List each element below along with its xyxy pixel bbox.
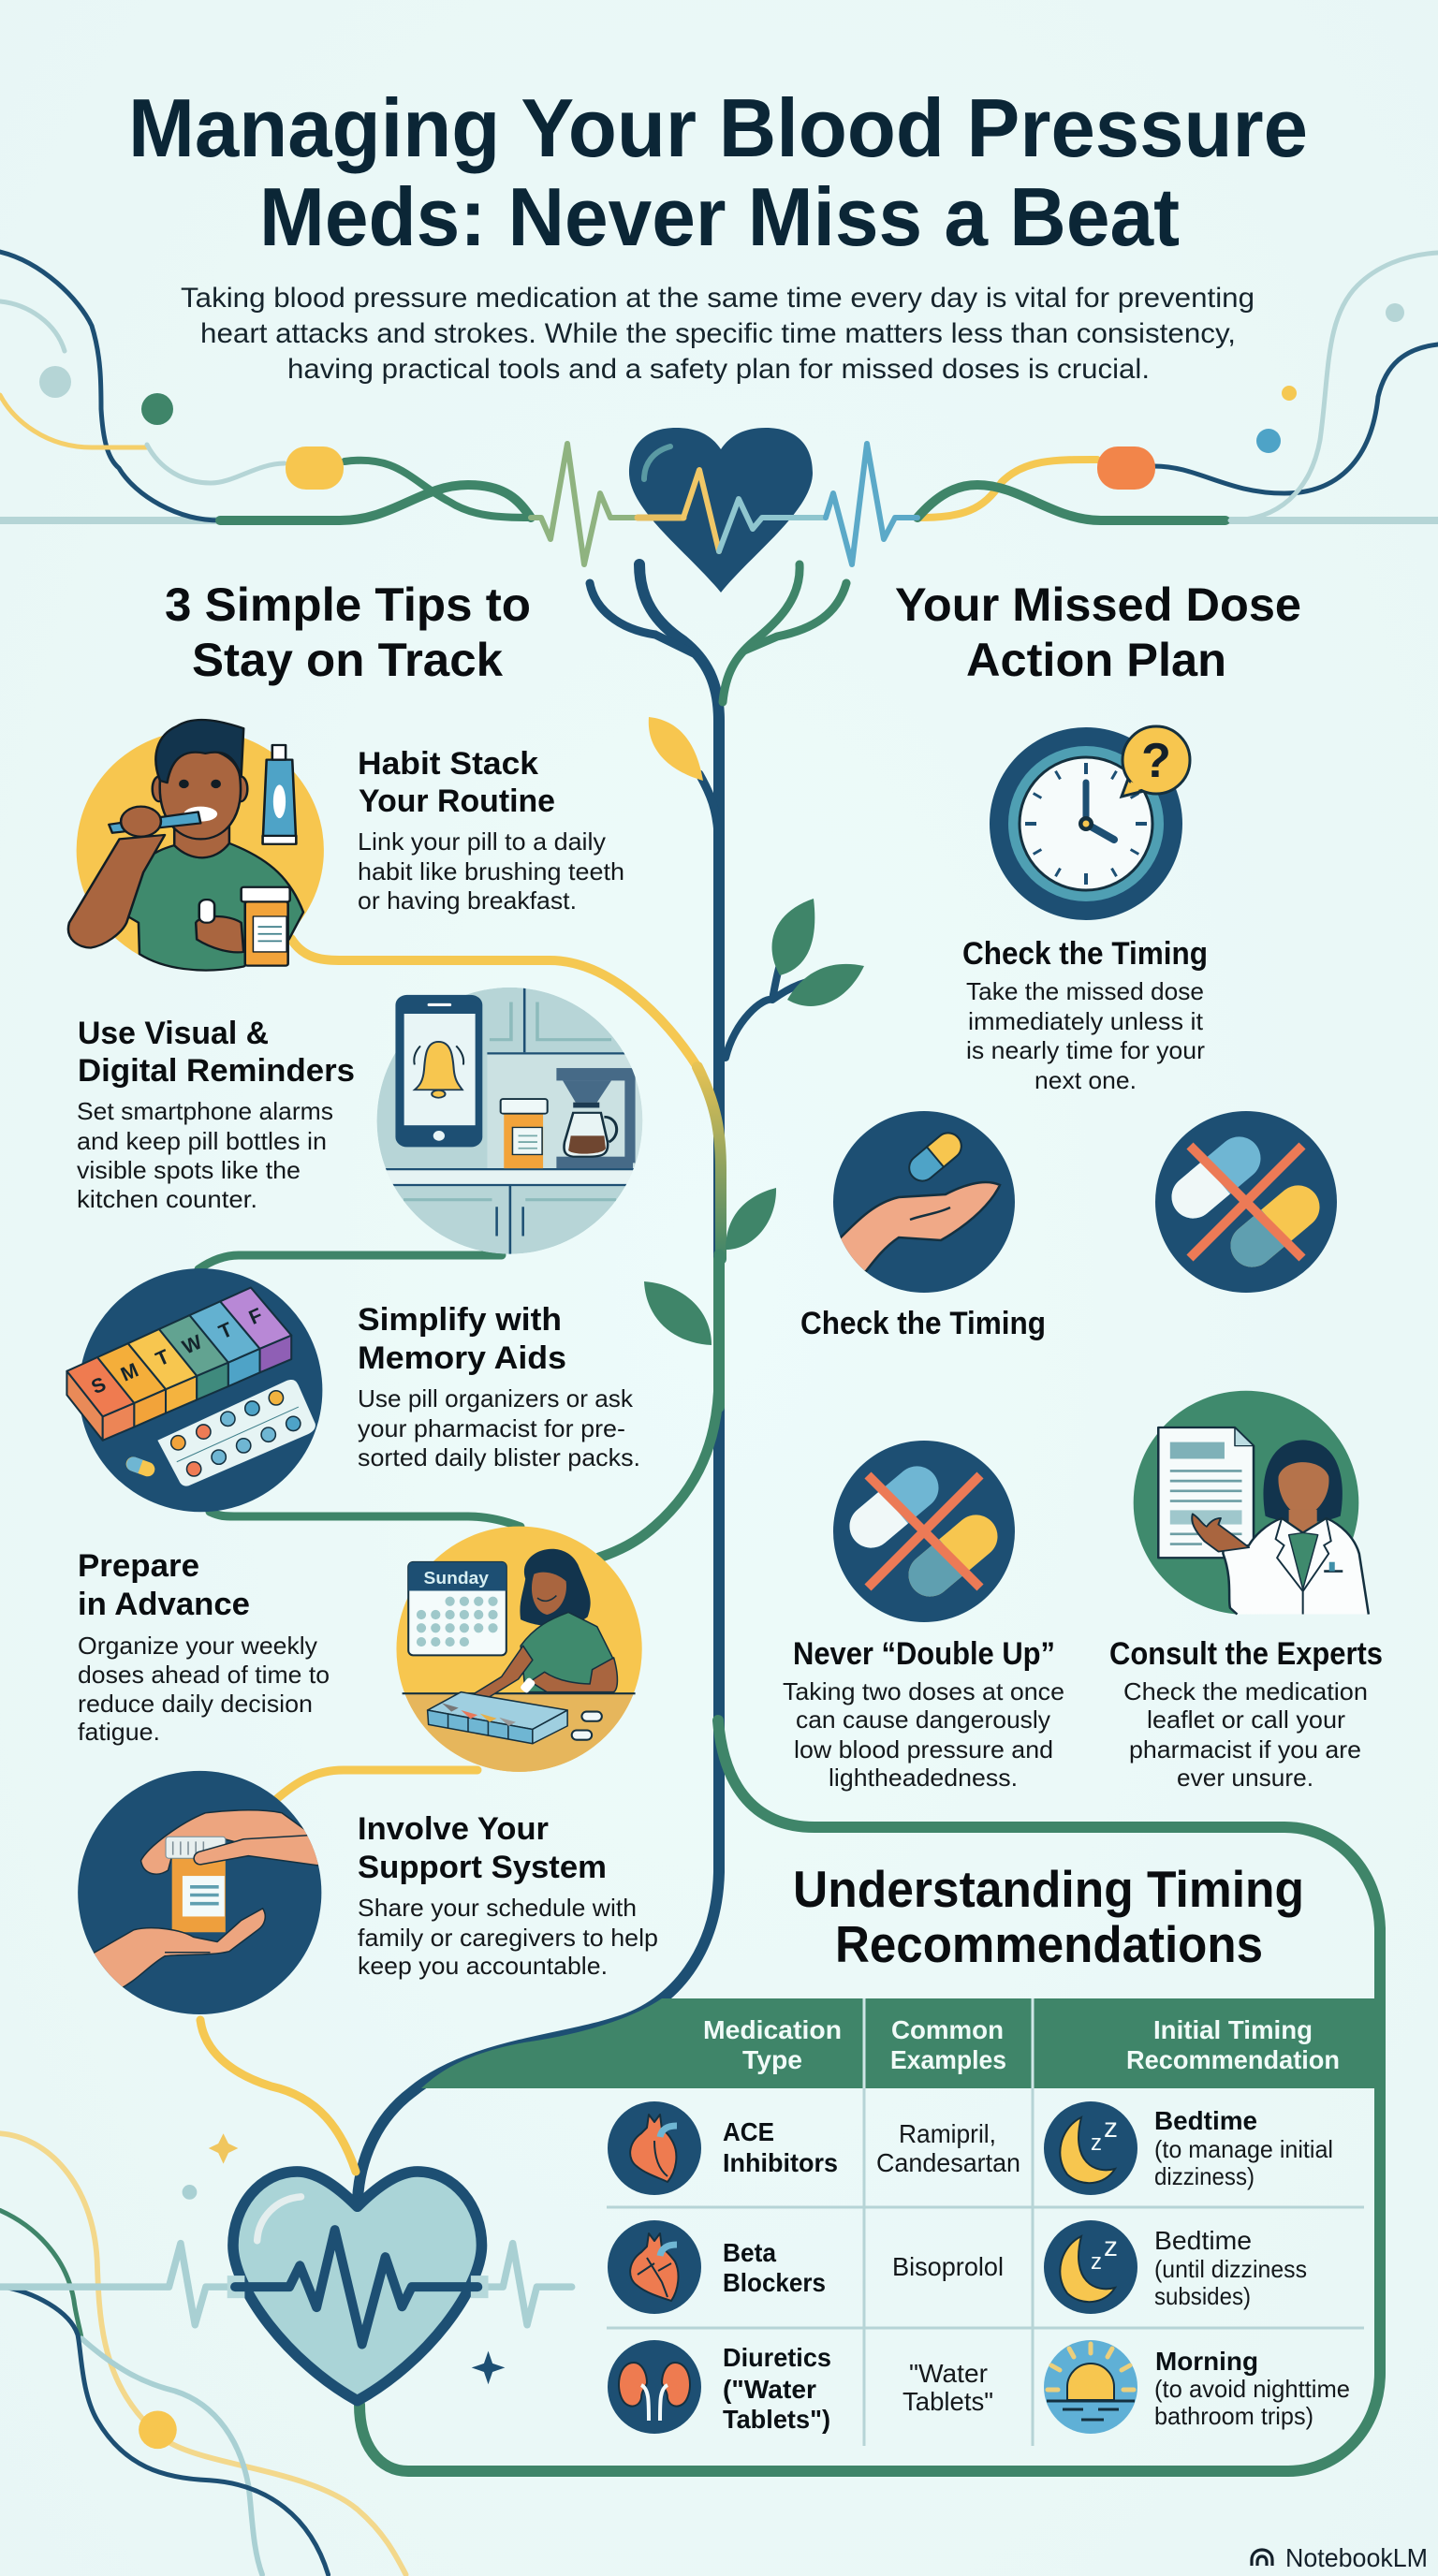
text: ACE inhibitors (723, 2117, 838, 2177)
intro text: heart attacks and strokes. While the specific time matters less than consistency, (200, 318, 1236, 349)
panel: tip 4 prepare (78, 1527, 650, 1779)
text: never double up description: low blood pressure and (794, 1735, 1053, 1764)
text: prepare description: Organize your weekly (78, 1632, 317, 1660)
text: consult the experts description: ever unsure. (1177, 1764, 1313, 1792)
intro text: having practical tools and a safety plan for missed doses is crucial. (287, 354, 1150, 385)
icon: phone alarm in kitchen (373, 988, 645, 1254)
icon: woman sorting pills with calendar: Sunday (424, 1568, 490, 1588)
text: ACE inhibitors: ACE (723, 2117, 774, 2146)
icon: moon (1044, 2220, 1137, 2314)
heading: check the timing second: Check the Timing (800, 1306, 1046, 1341)
icon: sunrise (1044, 2340, 1137, 2434)
text: bedtime: subsides) (1154, 2282, 1251, 2310)
text: morning: bathroom trips) (1154, 2402, 1313, 2430)
heading: memory aids: Memory Aids (358, 1340, 566, 1376)
intro text (181, 283, 1255, 385)
heading: prepare: Prepare (78, 1548, 199, 1584)
heading: consult the experts: Consult the Experts (1109, 1636, 1383, 1672)
text: beta blockers: Blockers (723, 2268, 826, 2297)
text: support system description (358, 1894, 658, 1980)
text: check the timing description: immediately unless it (968, 1007, 1204, 1035)
table header: Common (891, 2015, 1004, 2044)
icon: crossed-out capsules (1155, 1111, 1337, 1293)
text: check the timing description (966, 977, 1205, 1094)
text: check the timing description: next one. (1034, 1066, 1137, 1094)
heading: reminders: Use Visual & (78, 1016, 269, 1051)
logo: NotebookLM: NotebookLM (1285, 2543, 1428, 2572)
text: habit stack description: or having breakfast. (358, 886, 577, 915)
heading: prepare: in Advance (78, 1587, 250, 1622)
text: memory aids description: sorted daily blister packs. (358, 1443, 640, 1471)
heading: missed dose: Action Plan (966, 634, 1226, 686)
text: example: Tablets" (902, 2387, 993, 2416)
heading: missed dose: Your Missed Dose (895, 578, 1301, 631)
panel: timing recommendations (360, 1720, 1380, 2471)
icon: moon: z (1091, 2249, 1102, 2275)
icon: doctor with leaflet (1134, 1391, 1369, 1615)
text: prepare description: reduce daily decision (78, 1690, 313, 1718)
heading: support system: Support System (358, 1850, 607, 1885)
panel: tip 1 habit stack (68, 720, 624, 971)
table header: Medication (703, 2015, 842, 2044)
icon: pill organizer and blister pack: M (117, 1358, 142, 1386)
text: bedtime: (until dizziness (1154, 2255, 1307, 2283)
text: consult the experts description (1123, 1677, 1368, 1792)
text: consult the experts description: pharmacist if you are (1129, 1735, 1361, 1764)
icon: woman sorting pills with calendar (391, 1527, 650, 1779)
text: diuretics (723, 2343, 831, 2434)
icon: clock with question bubble (990, 726, 1190, 920)
text: morning (1154, 2347, 1350, 2430)
text: reminders description: and keep pill bottles in (77, 1127, 327, 1155)
text: ACE inhibitors: Inhibitors (723, 2148, 838, 2177)
icon: moon (1044, 2101, 1137, 2195)
icon: pill organizer and blister pack: T (215, 1318, 236, 1343)
heading: support system: Involve Your (358, 1811, 549, 1847)
panel: check the timing (clock) (962, 726, 1208, 1094)
panel: tip 5 support system (72, 1771, 658, 2014)
text: prepare description: doses ahead of time to (78, 1661, 330, 1689)
panel: tip 3 memory aids (66, 1268, 640, 1512)
text: never double up description: can cause dangerously (796, 1705, 1050, 1734)
icon: moon: z (1104, 2232, 1118, 2262)
text: morning: (to avoid nighttime (1154, 2375, 1350, 2403)
heading: habit stack (358, 746, 555, 819)
icon: bottom heart with ECG (0, 2133, 572, 2449)
title (128, 81, 1308, 263)
text: bedtime: Bedtime (1154, 2226, 1252, 2255)
heading: never double up: Never “Double Up” (793, 1636, 1055, 1672)
text: never double up description (783, 1677, 1064, 1792)
text: reminders description: Set smartphone alarms (77, 1097, 333, 1125)
icon: moon: z (1104, 2113, 1118, 2144)
panel: consult the experts (1109, 1391, 1383, 1792)
heading: memory aids: Simplify with (358, 1302, 562, 1338)
heading: reminders (78, 1016, 355, 1089)
text: support system description: keep you accountable. (358, 1952, 608, 1980)
leaves (644, 717, 864, 1345)
table grid (607, 2088, 1364, 2446)
text: examples (876, 2119, 1020, 2177)
text: bedtime (1154, 2226, 1307, 2310)
icon: heart (608, 2101, 701, 2195)
text: prepare description (78, 1632, 330, 1746)
icon: pill organizer and blister pack: S (88, 1372, 110, 1398)
icon: pill organizer and blister pack (66, 1268, 322, 1512)
panel: never double up (783, 1441, 1064, 1792)
table header: Examples (890, 2045, 1006, 2074)
text: memory aids description: your pharmacist for pre- (358, 1414, 625, 1442)
heading: memory aids (358, 1302, 566, 1376)
text: habit stack description: Link your pill to a daily (358, 827, 606, 856)
text: bedtime: (to manage initial (1154, 2135, 1333, 2163)
text: habit stack description: habit like brushing teeth (358, 857, 624, 886)
text: beta blockers (723, 2238, 826, 2297)
row: ACE inhibitors (608, 2101, 1333, 2195)
row: beta blockers (608, 2220, 1307, 2314)
text: reminders description (77, 1097, 333, 1213)
heading: understanding timing: Recommendations (835, 1915, 1263, 1973)
text: never double up description: lightheadedness. (829, 1764, 1018, 1792)
text: examples: Ramipril, (899, 2119, 996, 2148)
text: reminders description: visible spots like the (77, 1156, 301, 1184)
bottom decorative curves (0, 2133, 406, 2575)
top heart with ECG (531, 428, 917, 593)
icon: hands passing bottle (72, 1771, 325, 2014)
text: memory aids description: Use pill organizers or ask (358, 1384, 634, 1412)
text: bedtime: Bedtime (1154, 2106, 1257, 2135)
icon: man brushing teeth (68, 720, 324, 971)
text: diuretics: ("Water (723, 2375, 816, 2404)
text: check the timing description: is nearly time for your (966, 1036, 1205, 1064)
icon: kidneys (608, 2340, 701, 2434)
header dots and capsules (39, 303, 1404, 490)
row: diuretics (608, 2340, 1350, 2434)
text: reminders description: kitchen counter. (77, 1185, 257, 1213)
heading: reminders: Digital Reminders (78, 1053, 355, 1089)
text: habit stack description (358, 827, 624, 915)
panel border (360, 1720, 1380, 2471)
title: Meds: Never Miss a Beat (259, 170, 1180, 263)
header decorative lines (0, 252, 1438, 520)
intro text: Taking blood pressure medication at the same time every day is vital for preventing (181, 283, 1255, 314)
title: Managing Your Blood Pressure (128, 81, 1308, 174)
heading: tips (165, 578, 531, 686)
heading: habit stack: Your Routine (359, 783, 555, 819)
text: never double up description: Taking two doses at once (783, 1677, 1064, 1705)
heading: understanding timing: Understanding Timing (793, 1860, 1304, 1918)
text: morning: Morning (1155, 2347, 1258, 2376)
heading: habit stack: Habit Stack (358, 746, 538, 782)
text: example (902, 2359, 993, 2416)
text: check the timing description: Take the missed dose (966, 977, 1204, 1005)
icon: heart with vessels (608, 2220, 701, 2314)
heading: tips: Stay on Track (192, 634, 503, 686)
icon: pill organizer and blister pack: W (179, 1330, 206, 1359)
text: diuretics: Diuretics (723, 2343, 831, 2372)
text: beta blockers: Beta (723, 2238, 776, 2267)
icon: crossed-out capsules (833, 1441, 1015, 1622)
table header: Initial Timing (1153, 2015, 1313, 2044)
text: consult the experts description: leaflet or call your (1147, 1705, 1345, 1734)
table header: Type (742, 2045, 802, 2074)
icon: clock with question bubble: ? (1141, 734, 1171, 788)
table header (421, 1998, 1375, 2088)
icon: pill organizer and blister pack: T (153, 1345, 173, 1370)
panel: tip 2 reminders (77, 988, 645, 1254)
heading: prepare (78, 1548, 250, 1622)
heading: check the timing: Check the Timing (962, 936, 1208, 972)
icon: hand with capsule (824, 1111, 1015, 1293)
table header: Recommendation (1126, 2045, 1340, 2074)
central vine (198, 564, 846, 2200)
heading: support system (358, 1811, 607, 1885)
text: support system description: Share your schedule with (358, 1894, 637, 1922)
text: memory aids description (358, 1384, 640, 1471)
text: diuretics: Tablets") (723, 2405, 830, 2434)
heading: tips: 3 Simple Tips to (165, 578, 531, 631)
text: example: Bisoprolol (892, 2252, 1004, 2281)
heading: understanding timing (793, 1860, 1304, 1973)
icon: pill organizer and blister pack: F (245, 1304, 266, 1329)
text: examples: Candesartan (876, 2148, 1020, 2177)
text: example: "Water (909, 2359, 988, 2388)
text: consult the experts description: Check the medication (1123, 1677, 1368, 1705)
text: prepare description: fatigue. (78, 1718, 160, 1746)
text: bedtime: dizziness) (1154, 2162, 1255, 2190)
text: support system description: family or caregivers to help (358, 1924, 658, 1952)
icon: moon: z (1091, 2130, 1102, 2156)
text: bedtime (1154, 2106, 1333, 2190)
heading: missed dose (895, 578, 1301, 686)
